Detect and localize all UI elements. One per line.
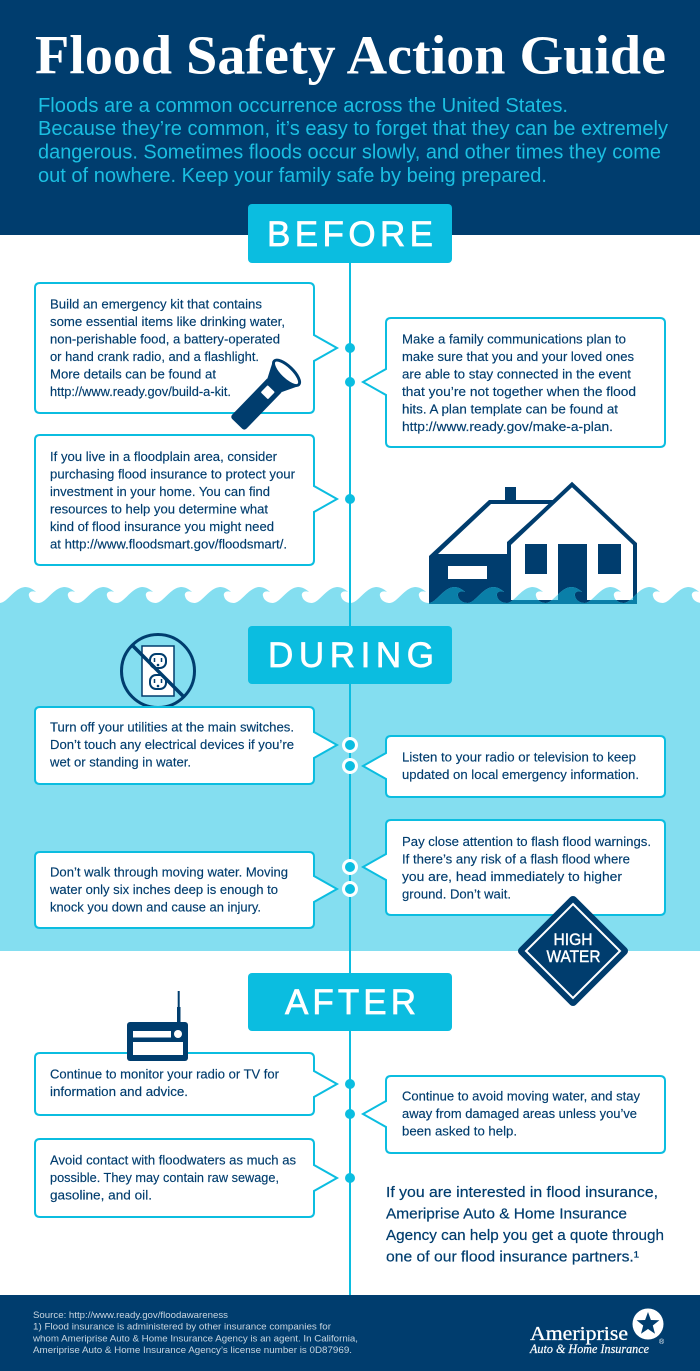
callout text xyxy=(50,1066,280,1099)
intro paragraph: out of nowhere. Keep your family safe by being prepared. xyxy=(38,165,547,187)
intro paragraph: Because they’re common, it’s easy to forget that they can be extremely xyxy=(38,118,668,140)
callout text: Build an emergency kit that contains xyxy=(50,296,262,312)
heading: during: DURING xyxy=(268,636,434,675)
intro paragraph: Floods are a common occurrence across the United States. xyxy=(38,95,568,117)
house icon xyxy=(429,484,635,604)
callout text: Turn off your utilities at the main switches. xyxy=(50,720,294,734)
timeline line xyxy=(349,235,351,1295)
callout text: are able to stay connected in the event xyxy=(402,366,631,382)
panel: monitor radio xyxy=(35,1053,337,1115)
panel: avoid moving water xyxy=(363,1076,665,1153)
icon: radio xyxy=(127,991,188,1061)
callout text: been asked to help. xyxy=(402,1124,517,1138)
footer notes xyxy=(32,1310,358,1356)
callout text xyxy=(50,449,296,552)
panel: flash flood warnings xyxy=(363,820,665,915)
intro paragraph xyxy=(38,95,668,187)
callout text xyxy=(50,1152,296,1202)
logo: Ameriprise Auto & Home Insurance: Ameriprise xyxy=(530,1323,628,1345)
callout text xyxy=(50,296,285,399)
flood insurance call to action xyxy=(386,1184,664,1266)
callout text: you are, head immediately to higher xyxy=(402,869,623,884)
callout box xyxy=(35,852,337,928)
callout text: at http://www.floodsmart.gov/floodsmart/. xyxy=(50,536,287,552)
flood insurance call to action: Agency can help you get a quote through xyxy=(386,1227,664,1244)
callout text: Listen to your radio or television to keep xyxy=(402,750,636,764)
callout text: Avoid contact with floodwaters as much as xyxy=(50,1152,296,1168)
logo star mark xyxy=(632,1308,664,1340)
callout text: Continue to avoid moving water, and stay xyxy=(402,1088,640,1104)
callout text: wet or standing in water. xyxy=(49,754,191,770)
panel: moving water xyxy=(35,852,337,928)
heading: before: BEFORE xyxy=(267,215,433,254)
callout text: hits. A plan template can be found at xyxy=(402,402,618,416)
flood insurance call to action: one of our flood insurance partners.¹ xyxy=(386,1248,639,1266)
during section water background xyxy=(0,603,700,951)
callout text: kind of flood insurance you might need xyxy=(50,519,274,534)
timeline dots: after xyxy=(345,1079,355,1183)
callout text: or hand crank radio, and a flashlight. xyxy=(50,349,259,364)
callout text: gasoline, and oil. xyxy=(50,1188,152,1202)
flood insurance call to action: If you are interested in flood insurance, xyxy=(386,1184,658,1201)
callout text: resources to help you determine what xyxy=(50,502,268,516)
heading: during xyxy=(248,626,452,684)
submerged house overlay xyxy=(429,587,637,604)
callout text: http://www.ready.gov/make-a-plan. xyxy=(402,419,613,434)
panel: build an emergency kit xyxy=(35,283,337,413)
callout box xyxy=(35,283,337,413)
logo: Ameriprise Auto & Home Insurance xyxy=(529,1308,665,1356)
callout box xyxy=(363,820,665,915)
callout text: that you’re not together when the flood xyxy=(402,384,636,399)
icon: no electrical outlet xyxy=(122,634,194,708)
callout text xyxy=(49,864,288,914)
footer notes: Source: http://www.ready.gov/floodawareness xyxy=(33,1310,228,1321)
heading: after xyxy=(248,973,452,1031)
callout text xyxy=(402,332,636,434)
panel: flood insurance xyxy=(35,435,337,565)
callout text: Don’t touch any electrical devices if you’re xyxy=(50,737,294,752)
callout text: possible. They may contain raw sewage, xyxy=(50,1170,279,1185)
callout text: ground. Don’t wait. xyxy=(402,886,511,902)
callout text xyxy=(402,750,639,782)
callout text: Don’t walk through moving water. Moving xyxy=(50,864,288,880)
header band xyxy=(0,0,700,235)
timeline dots: during xyxy=(344,738,356,896)
callout text: some essential items like drinking water, xyxy=(50,314,285,329)
heading: before xyxy=(248,204,452,263)
heading: after: AFTER xyxy=(285,983,416,1022)
callout text: water only six inches deep is enough to xyxy=(49,882,278,897)
icon: high water sign xyxy=(522,900,624,1002)
callout text xyxy=(402,1088,640,1138)
panel: communications plan xyxy=(363,318,665,447)
callout box xyxy=(363,318,665,447)
callout text: http://www.ready.gov/build-a-kit. xyxy=(50,384,231,399)
logo: Ameriprise Auto & Home Insurance: Auto & Home Insurance xyxy=(529,1341,649,1356)
callout box xyxy=(363,1076,665,1153)
title: Flood Safety Action Guide xyxy=(35,24,666,86)
icon: flashlight xyxy=(225,356,303,436)
wave band xyxy=(0,587,700,610)
timeline dots: before xyxy=(345,343,355,504)
panel: listen to radio xyxy=(363,736,665,797)
callout text: information and advice. xyxy=(50,1084,188,1099)
icon: high water sign: HIGH xyxy=(554,930,592,949)
intro paragraph: dangerous. Sometimes floods occur slowly, and other times they come xyxy=(38,142,661,164)
callout text: More details can be found at xyxy=(50,366,216,382)
callout text: updated on local emergency information. xyxy=(402,767,639,782)
callout text: If there’s any risk of a flash flood where xyxy=(402,852,630,866)
callout text: If you live in a floodplain area, consider xyxy=(50,449,278,464)
footer notes: 1) Flood insurance is administered by other insurance companies for xyxy=(33,1322,331,1332)
callout text xyxy=(49,720,294,770)
footer notes: whom Ameriprise Auto & Home Insurance Agency is an agent. In California, xyxy=(32,1334,358,1344)
callout box xyxy=(363,736,665,797)
callout text: Pay close attention to flash flood warnings. xyxy=(402,834,651,849)
callout text: away from damaged areas unless you’ve xyxy=(402,1106,637,1121)
callout box xyxy=(35,1053,337,1115)
panel: turn off utilities xyxy=(35,707,337,784)
callout box xyxy=(35,707,337,784)
icon: high water sign: WATER xyxy=(546,947,600,966)
footer band xyxy=(0,1295,700,1371)
callout box xyxy=(35,1139,337,1217)
callout text: knock you down and cause an injury. xyxy=(50,900,261,914)
callout text: make sure that you and your loved ones xyxy=(402,349,634,364)
callout text: Make a family communications plan to xyxy=(402,332,626,346)
callout box xyxy=(35,435,337,565)
callout text: non-perishable food, a battery-operated xyxy=(50,332,280,346)
footer notes: Ameriprise Auto & Home Insurance Agency’s license number is 0D87969. xyxy=(33,1345,352,1356)
callout text: purchasing flood insurance to protect your xyxy=(50,466,296,482)
panel: avoid floodwaters xyxy=(35,1139,337,1217)
logo: Ameriprise Auto & Home Insurance: ® xyxy=(659,1338,665,1346)
callout text xyxy=(402,834,651,902)
callout text: investment in your home. You can find xyxy=(50,484,270,499)
flood insurance call to action: Ameriprise Auto & Home Insurance xyxy=(386,1206,627,1222)
callout text: Continue to monitor your radio or TV for xyxy=(50,1066,280,1082)
